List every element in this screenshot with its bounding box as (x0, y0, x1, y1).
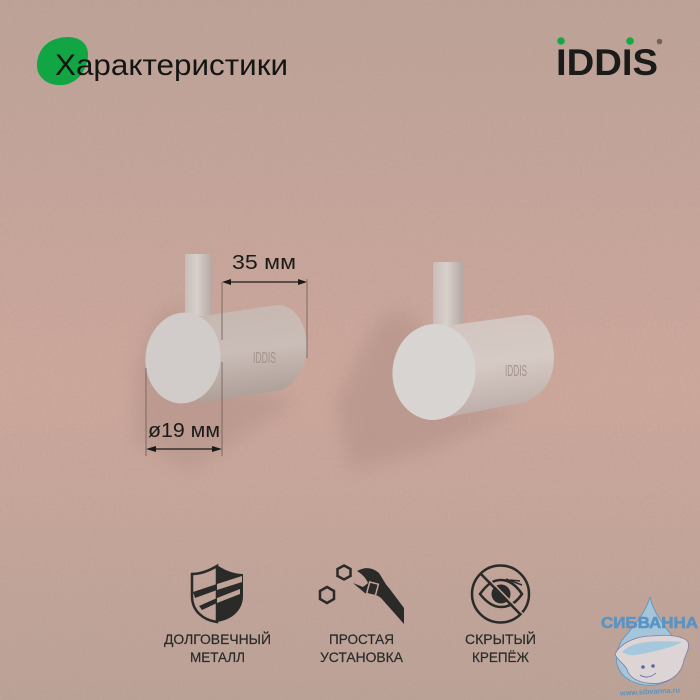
hook shadow (135, 305, 300, 470)
hook front disc (141, 309, 225, 407)
hook cylinder body (438, 315, 554, 417)
dimension: 35 mm (222, 251, 307, 358)
watermark logo: Sibvanna (601, 597, 698, 698)
water drop (616, 597, 683, 685)
label: ПРОСТАЯ (329, 631, 394, 647)
icon: wrench and nuts (320, 566, 404, 624)
icon: crossed-out eye (472, 566, 529, 622)
title text: Характеристики (55, 49, 288, 82)
bathtub face (641, 665, 645, 669)
title (37, 37, 288, 85)
engraved logo: IDDIS (253, 350, 276, 367)
hook peg (433, 262, 463, 328)
engraved logo: IDDIS (505, 363, 527, 380)
icon: shield (192, 565, 243, 622)
feature: easy installation: УСТАНОВКА (320, 649, 404, 665)
feature: durable metal: МЕТАЛЛ (190, 649, 245, 665)
brand name: СИБВАННА (601, 615, 698, 632)
hook cylinder body (190, 305, 307, 403)
feature: hidden mount: КРЕПЁЖ (472, 649, 529, 665)
right hook product (335, 262, 554, 470)
dimension: 35 mm: 35 мм (232, 251, 296, 274)
dimension: 19 mm diameter (146, 362, 222, 456)
hook shadow (335, 310, 520, 470)
label: ДОЛГОВЕЧНЫЙ (164, 630, 271, 647)
feature: durable metal (164, 565, 271, 665)
brand logo: IDDIS: IDDIS (556, 42, 658, 83)
bathtub basin (622, 641, 682, 655)
green blob (37, 37, 88, 85)
label: СКРЫТЫЙ (465, 630, 536, 647)
bathtub (615, 635, 689, 683)
feature: hidden mount (465, 566, 536, 665)
hook peg (185, 254, 212, 316)
website: www.sibvanna.ru (619, 685, 681, 698)
feature: easy installation (320, 566, 404, 665)
dimension: 19 mm diameter: ø19 мм (148, 419, 220, 442)
left hook product (135, 254, 307, 470)
hook front disc (388, 321, 480, 423)
